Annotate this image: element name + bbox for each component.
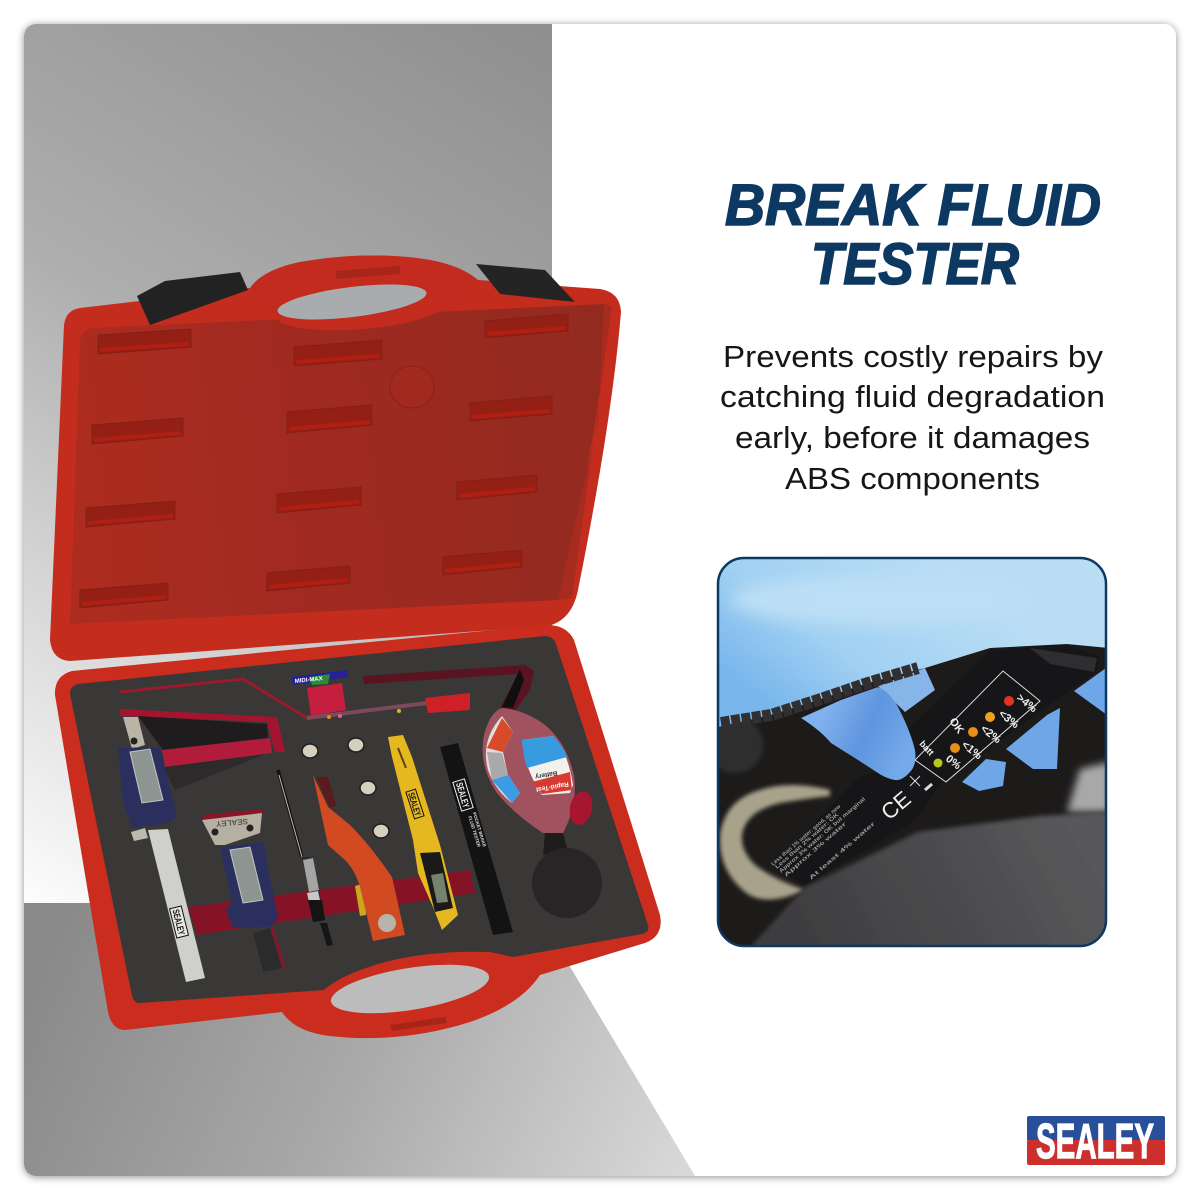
glove main	[718, 556, 1108, 727]
printed instructions	[770, 796, 878, 882]
title	[725, 173, 1101, 297]
lid round mark	[390, 366, 434, 408]
small digital caliper: SEALEY	[215, 817, 248, 828]
glove highlight	[728, 576, 956, 628]
lid handle	[252, 255, 478, 330]
black pen tester: POCKET BRAKE	[472, 812, 487, 848]
black pen tester	[440, 743, 513, 935]
case base	[55, 625, 661, 1038]
indicator labels: <1%	[959, 739, 984, 762]
latch right	[476, 264, 575, 302]
top wire probe	[120, 670, 470, 719]
rear fingers	[878, 668, 1107, 791]
glove finger	[801, 687, 915, 780]
small digital caliper	[202, 809, 284, 972]
printed instructions: Less than 1% water: good, as new	[770, 803, 843, 868]
upper right probe	[363, 665, 534, 711]
CE mark: CE	[876, 786, 916, 825]
printed instructions: Less than 2% water: OK	[774, 812, 840, 871]
indicator lights	[1004, 696, 1014, 706]
description text: ABS components	[785, 461, 1040, 496]
title: BREAK FLUID	[725, 173, 1101, 238]
description text: catching fluid degradation	[720, 379, 1105, 414]
dark fitting	[719, 722, 764, 774]
battery tester bulb: Battery	[534, 769, 558, 780]
SEALEY mark on blade: SEALEY	[170, 908, 187, 937]
magnets	[302, 738, 389, 838]
product: red tool case	[50, 255, 661, 1038]
printed instructions: Approx 3% water	[783, 820, 849, 879]
top wire probe: MIDI-MAX	[295, 676, 323, 685]
lower handle opening	[328, 956, 492, 1022]
black pen tester: SEALEY	[453, 781, 471, 810]
printed instructions: At least 4% water	[808, 820, 878, 882]
indicator labels: 0%	[943, 753, 963, 772]
glove cuff ridge	[721, 668, 918, 723]
indicator panel outline	[915, 671, 1040, 782]
black pen tester: FLUID TESTER	[467, 815, 482, 848]
box label	[291, 670, 348, 685]
indicator labels: >4%	[1014, 692, 1039, 715]
orange hydrometer gauge	[313, 775, 405, 941]
recess lips	[82, 328, 566, 604]
SEALEY mark on blade	[169, 906, 188, 938]
indicator labels	[918, 692, 1039, 772]
lower handle grip	[390, 1017, 447, 1031]
grey studio backdrop	[24, 24, 695, 1176]
indicator labels: <2%	[978, 723, 1003, 746]
lid recesses	[80, 314, 568, 608]
photo: tester held in blue glove	[707, 556, 1110, 950]
title: TESTER	[811, 232, 1019, 297]
needle probe	[278, 770, 333, 946]
printed instructions: Approx 3% water: OK but marginal	[778, 796, 867, 875]
yellow tester	[388, 735, 458, 930]
indicator labels: <3%	[996, 708, 1021, 731]
engine ring	[720, 785, 830, 900]
lid handle opening	[276, 278, 428, 326]
indicator labels: OK	[947, 716, 966, 736]
disposal mark	[910, 776, 932, 790]
description text: early, before it damages	[735, 420, 1090, 455]
yellow tester: SEALEY	[406, 791, 423, 817]
case lid	[50, 255, 621, 661]
battery tester bulb	[483, 708, 602, 918]
large digital caliper	[118, 709, 285, 982]
tester body	[770, 644, 1100, 885]
indicator labels: batt	[918, 739, 936, 758]
dark hose	[748, 812, 1110, 950]
photo border	[718, 558, 1106, 946]
metal fitting	[1067, 762, 1110, 812]
description text	[720, 339, 1105, 496]
latch left	[137, 272, 248, 325]
foam cutout strip	[188, 870, 475, 935]
battery tester bulb: Rapid-Test	[535, 780, 569, 793]
foam tray	[70, 636, 648, 1003]
description text: Prevents costly repairs by	[723, 339, 1104, 374]
